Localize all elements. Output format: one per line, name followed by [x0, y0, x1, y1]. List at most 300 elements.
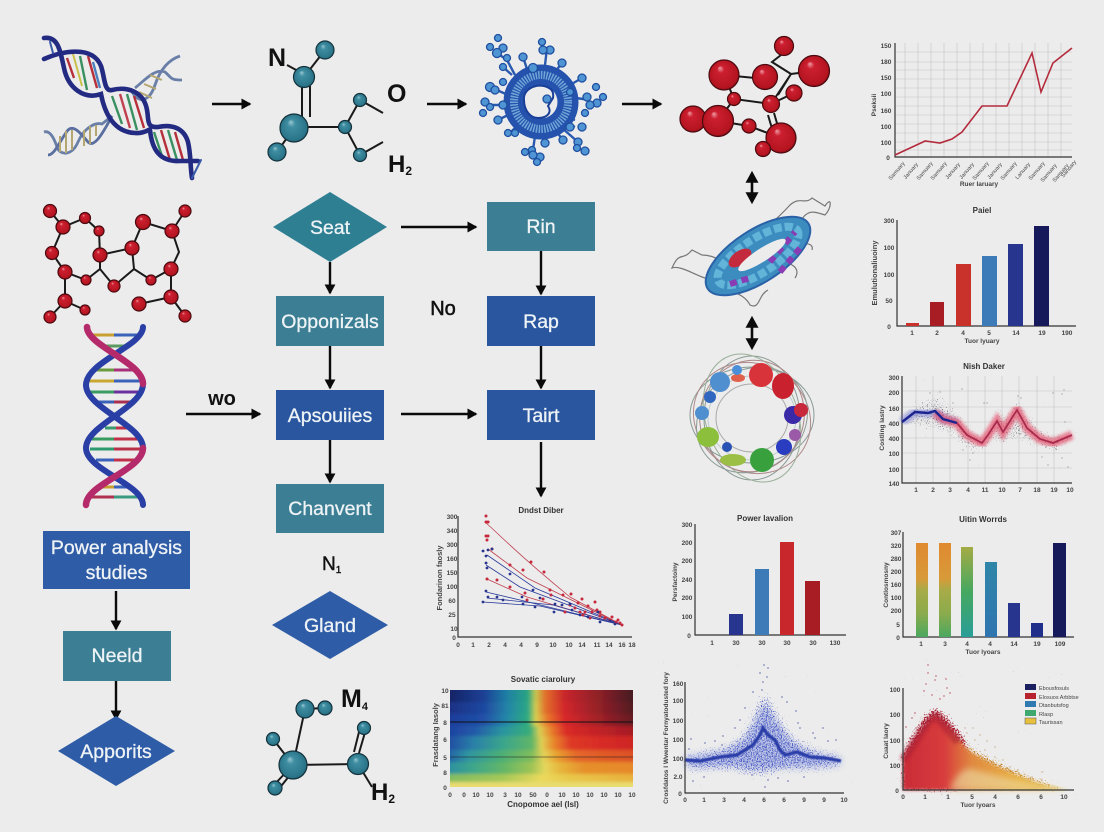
x tick labels: Sanuary: [1060, 159, 1078, 179]
grid: [902, 376, 1072, 483]
loops: [672, 198, 830, 306]
chart: line chart top right: [871, 43, 1078, 188]
x ticks: 30: [758, 640, 766, 647]
decision: Gland: [272, 591, 388, 659]
y tick labels: 150: [881, 43, 892, 50]
central hole: [735, 234, 789, 276]
x ticks: 19: [1033, 641, 1041, 648]
icon: large red molecule: [680, 36, 830, 156]
axes: [695, 524, 846, 635]
blue strands: [86, 327, 143, 505]
grid line: [450, 756, 633, 758]
icon: blue spiky protein: [480, 34, 606, 166]
ring light texture: [514, 75, 568, 129]
y ticks: 6: [443, 737, 447, 744]
x ticks: 1: [919, 641, 923, 648]
x ticks: 4: [519, 642, 523, 649]
y ticks: 100: [889, 467, 900, 474]
y ticks: 0: [443, 785, 447, 792]
arrow: protein to red molecule: [622, 103, 661, 105]
x ticks: [910, 330, 1073, 337]
x ticks: 11: [594, 642, 601, 649]
x ticks: 130: [830, 640, 841, 647]
step: Chanvent: [276, 484, 384, 533]
x ticks: 4: [988, 641, 992, 648]
y tick labels: [881, 43, 892, 162]
x ticks: 10: [565, 642, 573, 649]
grid lines: [450, 721, 633, 723]
x tick labels: Samuary: [888, 161, 907, 182]
title: Dndst Diber: [518, 506, 564, 515]
x ticks: 10: [1060, 794, 1068, 801]
y ticks: 160: [889, 406, 900, 413]
y ticks: 140: [889, 481, 900, 488]
x ticks: 14: [578, 642, 586, 649]
heat cells: [450, 690, 633, 787]
x ticks: 2: [935, 330, 939, 337]
y ticks: 100: [884, 245, 895, 252]
y ticks: 240: [682, 577, 693, 584]
icon: elongated protein ribbon: [672, 198, 830, 310]
x ticks: 14: [1010, 641, 1018, 648]
y ticks: 2.0: [673, 774, 683, 781]
x title: Cnopomoe ael (lsl): [507, 800, 579, 809]
step: Rin: Rin: [526, 216, 556, 238]
title: Power Iavalion: [737, 514, 793, 523]
x tick labels: Lanuary: [1015, 162, 1032, 181]
y ticks: [441, 688, 449, 792]
outer ribbon: [694, 202, 822, 310]
x tick labels: Samuary: [1040, 163, 1059, 184]
step: Rap: Rap: [523, 311, 559, 333]
bars: [916, 543, 1066, 637]
x ticks: 6: [1039, 794, 1043, 801]
x ticks: 30: [809, 640, 817, 647]
x ticks: 109: [1055, 641, 1066, 648]
label M4: M: [341, 685, 362, 713]
icon: DNA base pairs: [67, 54, 183, 160]
x title: Tuor lyoars: [966, 649, 1001, 656]
y tick labels: 100: [881, 124, 892, 131]
bonds: [273, 708, 372, 790]
axes: [897, 220, 1076, 326]
dark red dense edge: [903, 716, 958, 760]
x ticks: 0: [448, 792, 452, 799]
label M4: 4: [362, 701, 369, 713]
legend: Taurissan: [1039, 720, 1063, 726]
x ticks: 4: [961, 330, 965, 337]
step: Apsouiies: [276, 390, 384, 440]
cells ring: [709, 216, 807, 296]
atoms: [44, 204, 191, 323]
y ticks: 307: [891, 530, 902, 537]
x ticks: 0: [456, 642, 460, 649]
y ticks: 50: [885, 298, 893, 305]
diamond: Apporits: Apporits: [80, 741, 152, 763]
dense mean line: [685, 728, 841, 761]
x ticks: 16: [618, 642, 626, 649]
chart: Dndst Diber scatter: [435, 506, 636, 649]
y ticks: 150: [447, 570, 458, 577]
bars: [705, 542, 820, 635]
x axis title: Ruer Iaruary: [960, 181, 999, 188]
x tick labels: Samuary: [972, 161, 991, 182]
step: Rin: [487, 202, 595, 251]
y ticks: 5: [443, 755, 447, 762]
y ticks: 280: [891, 556, 902, 563]
y ticks: 400: [889, 421, 900, 428]
chart: Sovatic ciarolury heatmap: [431, 675, 638, 809]
x tick labels: Samuary: [916, 161, 935, 182]
x ticks: 19: [1038, 330, 1046, 337]
legend: Ebousfosuls: [1039, 686, 1069, 692]
y ticks: 200: [682, 540, 693, 547]
protein ring body: [514, 75, 568, 129]
x ticks: 9: [802, 797, 806, 804]
arrow: DNA to molecule: [212, 103, 250, 105]
icon: vertical DNA helix: [86, 327, 143, 505]
red patch: [725, 245, 755, 271]
arrow: helix to Apsouiies: [186, 413, 260, 415]
x ticks: 190: [1062, 330, 1073, 337]
y title: Fondarinon faosly: [435, 545, 444, 611]
axes: [903, 532, 1074, 637]
x ticks: 3: [948, 487, 952, 494]
atoms: [680, 36, 830, 156]
title: Sovatic ciarolury: [511, 675, 576, 684]
x ticks: 1: [914, 487, 918, 494]
y ticks: 300: [447, 542, 458, 549]
y ticks: 0: [678, 791, 682, 798]
axes: [895, 43, 1072, 157]
y ticks: 100: [447, 584, 458, 591]
x ticks: 2: [487, 642, 491, 649]
x ticks: [448, 792, 636, 799]
y ticks: 300: [682, 522, 693, 529]
y ticks: 200: [682, 595, 693, 602]
x ticks: 1: [910, 330, 914, 337]
step: Tairt: Tairt: [523, 405, 560, 427]
axes: [902, 376, 1072, 483]
y ticks: 100: [889, 451, 900, 458]
arrow: [329, 440, 331, 482]
y ticks: 8: [443, 770, 447, 777]
y ticks: 100: [673, 756, 684, 763]
bars: [906, 226, 1049, 326]
chart: Power Iavalion bars: [672, 514, 846, 647]
y title: Cuaat Iaory: [883, 723, 890, 759]
label H2: H: [371, 779, 388, 806]
title: Paiel: [973, 206, 991, 215]
stipple: [685, 690, 841, 776]
icon: twisted DNA double helix: [44, 38, 201, 178]
y ticks: 400: [889, 436, 900, 443]
y ticks: [884, 218, 895, 331]
x tick labels: January: [987, 162, 1004, 181]
y ticks: 100: [884, 272, 895, 279]
arrow: Apsouiies to Tairt: [401, 413, 476, 415]
y ticks: 25: [448, 612, 456, 619]
arrow: [540, 251, 542, 294]
x ticks: 4: [503, 642, 507, 649]
y tick labels: 150: [881, 75, 892, 82]
y tick labels: 160: [881, 108, 892, 115]
step: Opponizals: [276, 296, 384, 346]
x ticks: [710, 640, 841, 647]
title: Uitin Worrds: [959, 515, 1007, 524]
fit lines: [483, 523, 622, 625]
y ticks: 0: [887, 324, 891, 331]
arrow: [115, 591, 117, 629]
icon: teal molecule with labels: [268, 41, 412, 178]
label wo: wo: [207, 388, 236, 410]
x ticks: 9: [535, 642, 539, 649]
x ticks: 1: [923, 794, 927, 801]
y title: Costling lastry: [879, 405, 886, 451]
icon: red ring molecule: [44, 204, 191, 323]
x ticks: 10: [486, 792, 494, 799]
x ticks: 10: [998, 487, 1006, 494]
x ticks: 6: [782, 797, 786, 804]
y ticks: 340: [447, 528, 458, 535]
title: Nish Daker: [963, 362, 1005, 371]
x tick labels: January: [903, 162, 920, 181]
x ticks: 11: [982, 487, 989, 494]
x tick labels: January: [945, 162, 962, 181]
chart: Paiel bars: [870, 206, 1076, 345]
stems: [485, 48, 590, 150]
label N1: N: [322, 554, 336, 575]
x ticks: 19: [1050, 487, 1058, 494]
y ticks: 10: [441, 688, 449, 695]
step: Tairt: [487, 390, 595, 440]
y ticks: [682, 522, 693, 640]
y title: Persfactoiny: [672, 562, 679, 602]
y ticks: 160: [673, 681, 684, 688]
y ticks: 0: [896, 635, 900, 642]
axes: [685, 682, 844, 793]
chart: Nish Daker scatter line: [879, 362, 1074, 494]
x ticks: 10: [472, 792, 480, 799]
arrow: Seat to Rin: [401, 226, 476, 228]
x ticks: 1: [471, 642, 475, 649]
y ticks: 0: [452, 635, 456, 642]
purple patches: [730, 232, 800, 284]
x tick labels: Samuary: [1028, 161, 1047, 182]
x ticks: 7: [1018, 487, 1022, 494]
x ticks: 10: [628, 792, 636, 799]
axes: [903, 688, 1074, 790]
y title: Emulutionaliuoiny: [870, 240, 879, 306]
outline loops: [673, 340, 831, 496]
y ticks: [673, 681, 684, 798]
step: Chanvent: Chanvent: [288, 498, 372, 520]
x ticks: 1: [702, 797, 706, 804]
y title: Crosfdatos I Wwentar Fornyatodusted fory: [663, 672, 670, 804]
y ticks: 160: [891, 582, 902, 589]
atoms: [268, 41, 366, 162]
x ticks: 4: [966, 487, 970, 494]
x tick labels: January: [959, 162, 976, 181]
icon: back helix strands: [44, 56, 182, 155]
x ticks: 10: [600, 792, 608, 799]
x ticks: 0: [901, 794, 905, 801]
x ticks: 3: [503, 792, 507, 799]
icon: DNA backbone strands: [44, 38, 201, 178]
x ticks: 6: [1016, 794, 1020, 801]
y tick labels: 100: [881, 91, 892, 98]
x tick labels: Samuary: [1000, 161, 1019, 182]
x ticks: 6: [762, 797, 766, 804]
x ticks: 4: [742, 797, 746, 804]
x ticks: 50: [529, 792, 537, 799]
data line: [895, 48, 1072, 155]
grid: [895, 43, 1072, 157]
y ticks: 100: [673, 737, 684, 744]
x ticks: 0: [683, 797, 687, 804]
light bottom fade: [950, 769, 1060, 790]
x ticks: 10: [586, 792, 594, 799]
y ticks: [890, 687, 901, 795]
legend: Rlasp: [1039, 712, 1053, 718]
outlier points: [689, 665, 836, 787]
x ticks: 5: [987, 330, 991, 337]
decision: Gland: Gland: [304, 615, 356, 637]
box: Power analysis studies: Power analysis: [51, 537, 182, 559]
y ticks: [889, 375, 900, 488]
x ticks: 1: [710, 640, 714, 647]
icon: bottom teal molecule: [266, 685, 395, 806]
mean line: [902, 411, 957, 423]
y ticks: 0: [687, 633, 691, 640]
x ticks: 5: [970, 794, 974, 801]
decision: Seat: [273, 192, 387, 262]
y ticks: 200: [682, 558, 693, 565]
x ticks: [914, 487, 1074, 494]
x ticks: 4: [965, 641, 969, 648]
stipple red: [903, 706, 968, 790]
y ticks: 8: [443, 720, 447, 727]
x ticks: 14: [605, 642, 613, 649]
arrow: double-headed, molecule and protein: [751, 175, 753, 200]
diamond: Apporits: [58, 716, 175, 786]
x ticks: [456, 642, 636, 649]
coloured domains: [695, 363, 808, 472]
x ticks: 10: [614, 792, 622, 799]
y tick labels: 180: [881, 59, 892, 66]
x ticks: 2: [931, 487, 935, 494]
y ticks: 5: [896, 622, 900, 629]
x ticks: 30: [732, 640, 740, 647]
blue points: [483, 549, 615, 624]
y ticks: 320: [891, 543, 902, 550]
outlier points: [930, 389, 1068, 467]
y ticks: 160: [447, 556, 458, 563]
y ticks: 200: [891, 569, 902, 576]
axes: [458, 516, 632, 637]
x ticks: [683, 797, 848, 804]
x ticks: 10: [572, 792, 580, 799]
x ticks: 10: [1066, 487, 1074, 494]
bonds: [693, 55, 814, 149]
label H2: 2: [388, 792, 395, 806]
y ticks: 100: [890, 687, 901, 694]
chart: red to yellow density scatter: [883, 665, 1079, 809]
box: Neeld: Neeld: [92, 645, 142, 667]
x tick labels: Samuary: [930, 161, 949, 182]
y tick labels: 0: [886, 155, 890, 162]
outlier points orange: [965, 728, 1042, 780]
x title: Tuor lyuary: [965, 338, 1000, 345]
outlier points: [903, 665, 950, 740]
y ticks: 200: [889, 390, 900, 397]
x ticks: 10: [549, 642, 557, 649]
y ticks: 100: [673, 698, 684, 705]
y ticks: 200: [891, 608, 902, 615]
panel: left flowchart: [43, 531, 190, 786]
x ticks: 18: [628, 642, 636, 649]
x ticks: [919, 641, 1066, 648]
x ticks: 3: [943, 641, 947, 648]
y ticks: 81: [441, 703, 449, 710]
inner ball: [543, 95, 551, 103]
surface clusters: [480, 34, 606, 166]
x ticks: 0: [462, 792, 466, 799]
arrow: [329, 346, 331, 388]
box: Power analysis studies: studies: [86, 562, 148, 584]
y ticks: 100: [890, 738, 901, 745]
arrow: [540, 346, 542, 388]
decision: Seat: Seat: [310, 217, 351, 239]
x ticks: 14: [1012, 330, 1020, 337]
y ticks: 100: [890, 712, 901, 719]
magenta strands: [86, 327, 143, 505]
arrow: double-headed, ribbon and ring: [751, 320, 753, 346]
x title: Tuor lyoars: [961, 802, 996, 809]
step: Rap: [487, 296, 595, 346]
y ticks: 300: [889, 375, 900, 382]
panel: flowchart center: [186, 192, 595, 659]
stipple orange: [960, 742, 1068, 790]
step: Opponizals: Opponizals: [281, 311, 379, 333]
y ticks: 300: [884, 218, 895, 225]
x tick labels: Samuary: [1052, 163, 1071, 184]
y ticks: 100: [682, 614, 693, 621]
arrow: Tairt to chart: [540, 442, 542, 496]
label N: N: [268, 44, 286, 72]
x tick labels: [888, 159, 1078, 184]
x ticks: 9: [822, 797, 826, 804]
chart: blue density scatter: [663, 665, 848, 804]
y tick labels: 100: [881, 140, 892, 147]
y ticks: 100: [891, 595, 902, 602]
legend: Dtanbutsfog: [1039, 703, 1069, 709]
y ticks: 60: [448, 598, 456, 605]
filled density area: [903, 716, 1068, 790]
x ticks: 0: [545, 792, 549, 799]
label O: O: [387, 80, 406, 108]
legend: Elosuos Arbbtse: [1039, 695, 1079, 701]
y title: Contlosmosny: [883, 562, 890, 608]
bonds: [50, 211, 185, 317]
legend: [1025, 684, 1079, 726]
y ticks: [447, 514, 458, 642]
base pairs: [89, 335, 140, 497]
arrow: molecule to protein: [427, 103, 466, 105]
y ticks: 100: [890, 763, 901, 770]
label No: No: [430, 298, 456, 320]
y ticks: 300: [447, 514, 458, 521]
